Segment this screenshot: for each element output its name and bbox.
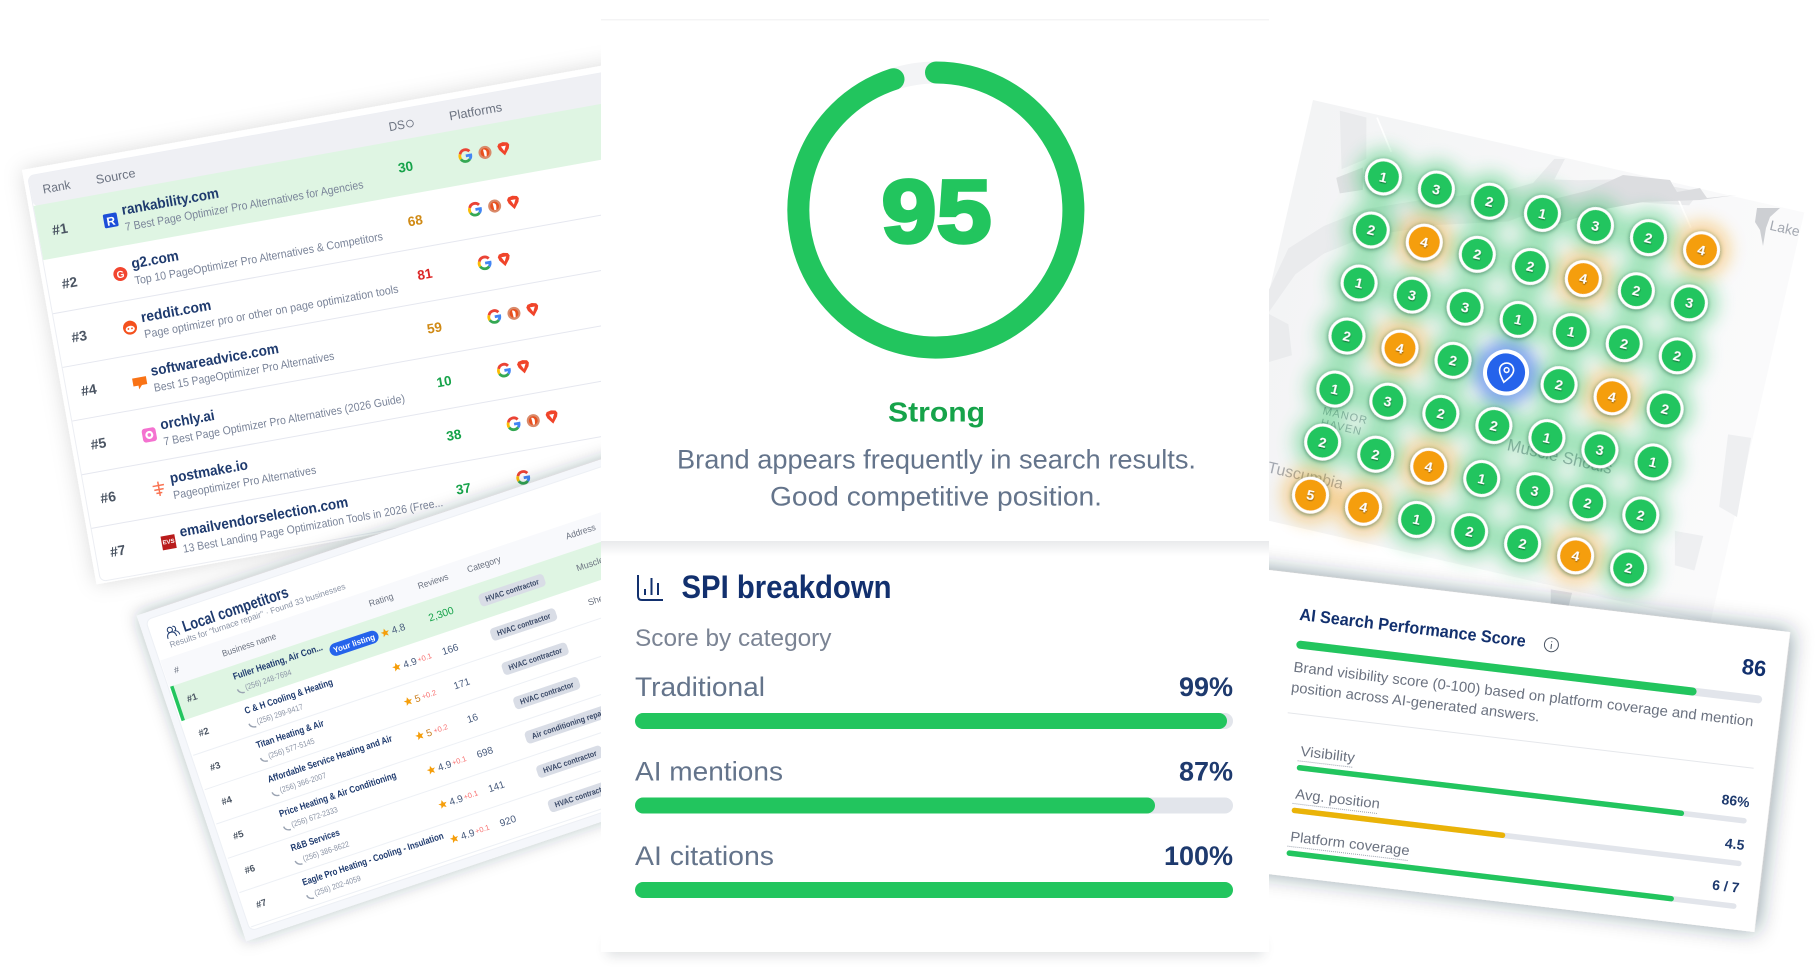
row 4: softwareadvice.com: Best 15 PageOptimizer Pro Alternatives <box>153 351 336 395</box>
card top edge <box>601 19 1269 20</box>
row 2: g2.com: #2 <box>60 273 79 292</box>
row 7: emailvendorselection.com <box>107 462 532 568</box>
marker rank numbers: 2 <box>1553 376 1565 393</box>
competitor row 1: Muscle Shoals <box>575 545 634 573</box>
score ring gauge <box>798 72 1074 348</box>
competitor row 7: 920 <box>498 814 518 830</box>
competitor row 3: +0.2 <box>421 688 437 701</box>
competitor row 7: 4.9 <box>460 828 477 843</box>
competitor row 6: #6 <box>243 863 257 877</box>
map terrain: river and land blocks <box>1269 111 1751 607</box>
marker rank numbers: 1 <box>1566 323 1577 340</box>
row 1: rankability.com: R <box>105 214 117 229</box>
row 4: softwareadvice.com: 59 <box>426 319 443 337</box>
row 2: g2.com: 68 <box>406 212 424 229</box>
table header: Category <box>466 554 503 575</box>
competitor row 7: (256) 202-4059 <box>313 874 362 898</box>
breakdown subheading: Score by category <box>635 625 832 652</box>
score number: 95 <box>882 161 992 261</box>
competitor row 7: Eagle Pro Heating - Cooling - Insulation <box>301 831 445 888</box>
metric: average position <box>1291 783 1746 867</box>
marker rank numbers: 2 <box>1317 433 1328 451</box>
competitor row 6: R&B Services <box>289 827 341 854</box>
table left rule <box>28 63 727 582</box>
marker rank numbers: 1 <box>1647 453 1659 471</box>
marker rank numbers: 1 <box>1513 311 1524 328</box>
row 1: rankability.com: 30 <box>397 158 414 176</box>
metric: traditional <box>635 672 1233 729</box>
panel: source ranking table <box>22 56 727 584</box>
marker rank numbers: 3 <box>1431 180 1442 198</box>
competitor row 6 <box>241 740 606 882</box>
competitor row 7: #7 <box>255 897 268 911</box>
marker rank numbers: 2 <box>1472 246 1483 263</box>
map: lake <box>1755 208 1780 246</box>
row 5: orchly.ai: #5 <box>89 434 108 453</box>
competitor row 4 <box>218 671 583 814</box>
marker rank numbers: 2 <box>1488 417 1500 434</box>
marker rank numbers: 2 <box>1582 494 1594 512</box>
marker rank numbers: 2 <box>1619 335 1630 352</box>
map labels: Lake <box>1768 217 1802 239</box>
panel: AI search performance score <box>1194 565 1790 932</box>
competitor row 6: (256) 386-8622 <box>302 839 351 863</box>
icon: info <box>1544 637 1559 653</box>
competitor row 2: HVAC contractor <box>496 612 552 638</box>
table header: Reviews <box>416 571 450 591</box>
score card background <box>1194 565 1790 932</box>
marker rank numbers: 1 <box>1329 380 1341 398</box>
metric: average position: Avg. position <box>1295 786 1381 812</box>
row separators <box>53 201 717 528</box>
highlighted row accent <box>170 686 185 721</box>
row 4: softwareadvice.com: #4 <box>80 381 98 399</box>
marker rank numbers: 2 <box>1341 327 1353 345</box>
row 3: reddit.com: Page optimizer pro or other on page optimization tools <box>143 284 400 341</box>
marker rank numbers <box>1305 168 1707 577</box>
row 7: emailvendorselection.com: 13 Best Landing Page Optimization Tools in 2026 (Free... <box>182 497 444 556</box>
table header band: Rank <box>42 178 72 197</box>
row 1: rankability.com: rankability.com <box>120 186 220 219</box>
score description: Brand visibility score (0-100) based on platform coverage and mention <box>1293 660 1754 730</box>
marker rank numbers: 5 <box>1305 486 1316 504</box>
marker rank numbers: 2 <box>1525 258 1536 275</box>
row 1: rankability.com <box>50 134 513 247</box>
row 6: postmake.io <box>98 402 561 515</box>
marker rank numbers: 3 <box>1684 294 1695 312</box>
competitor row 5: 4.9 <box>437 759 454 774</box>
metric: platform coverage: Platform coverage <box>1289 828 1411 858</box>
competitor row 2: (256) 299-9417 <box>255 702 305 726</box>
score description <box>677 444 1196 512</box>
row separators <box>193 580 773 927</box>
metric: AI mentions: 87% <box>1179 757 1233 787</box>
competitor row 3: #3 <box>209 760 222 774</box>
map labels: HAVEN <box>1319 417 1363 438</box>
competitor row 5 <box>230 699 615 848</box>
row 7: emailvendorselection.com: emailvendorselection.com <box>178 495 349 541</box>
table header: Address <box>564 522 597 541</box>
score heading: AI Search Performance Score <box>1299 605 1527 651</box>
row 7: emailvendorselection.com: 37 <box>455 480 472 498</box>
highlighted row background <box>34 93 669 260</box>
competitor row 5: +0.1 <box>451 754 468 767</box>
table card background <box>22 57 726 584</box>
marker rank numbers: 3 <box>1529 482 1541 499</box>
competitor row 1: 4.8 <box>390 622 407 637</box>
table header <box>160 484 692 687</box>
competitor row 1: #1 <box>185 691 200 705</box>
competitor row 3: HVAC contractor <box>507 646 563 672</box>
metric: AI mentions <box>635 757 1233 814</box>
competitor row 6: +0.1 <box>462 788 479 802</box>
row 5: orchly.ai: 7 Best Page Optimizer Pro Alternatives (2026 Guide) <box>163 393 406 448</box>
blue heat glow <box>1468 334 1544 411</box>
marker rank numbers: 4 <box>1423 458 1435 475</box>
competitor row 3: (256) 577-5145 <box>267 736 316 760</box>
competitor row 5: 698 <box>475 745 495 761</box>
competitor row 6: 141 <box>487 779 507 795</box>
metric: AI citations <box>635 841 1233 898</box>
competitor row 7: HVAC contractor <box>554 783 609 809</box>
marker rank numbers: 3 <box>1594 441 1606 459</box>
competitor row 1 <box>183 539 636 711</box>
competitors card background <box>137 437 777 941</box>
highlighted row background <box>170 511 704 721</box>
map labels: Muscle Shoals <box>1506 435 1614 478</box>
breakdown heading: SPI breakdown <box>682 569 892 605</box>
competitor row 2: Sheffield <box>587 587 623 607</box>
competitor row 4: (256) 366-2007 <box>279 771 328 795</box>
competitor row 1: Fuller Heating, Air Con... <box>232 642 324 683</box>
row 6: postmake.io: #6 <box>99 488 117 506</box>
competitor row 5: Air conditioning repair <box>530 707 607 741</box>
map base <box>1219 100 1804 622</box>
center location marker <box>1481 347 1531 398</box>
table header: # <box>173 664 181 675</box>
row 3: reddit.com: #3 <box>70 327 88 345</box>
row 6: postmake.io: Pageoptimizer Pro Alternatives <box>172 465 317 502</box>
subheading: results summary: Results for "furnace repair" · Found 33 businesses <box>168 581 347 650</box>
marker rank numbers: 4 <box>1394 340 1406 357</box>
competitor row 4: #4 <box>220 794 234 808</box>
competitor row 2: 4.9 <box>402 656 419 671</box>
table header band <box>28 63 660 207</box>
row 4: softwareadvice.com <box>79 294 542 408</box>
marker rank numbers: 2 <box>1366 221 1377 239</box>
competitor row 1: (256) 248-7694 <box>244 668 293 692</box>
marker rank numbers: 2 <box>1643 229 1654 246</box>
marker rank numbers: 1 <box>1378 168 1389 186</box>
marker rank numbers: 2 <box>1484 193 1495 210</box>
marker rank numbers: 2 <box>1635 506 1647 524</box>
row 2: g2.com: Top 10 PageOptimizer Pro Alternatives & Competitors <box>134 231 384 287</box>
row 1: rankability.com: #1 <box>51 220 69 238</box>
metric: AI citations: 100% <box>1164 841 1233 871</box>
marker rank numbers: 4 <box>1419 233 1430 251</box>
row 5: orchly.ai: 10 <box>435 373 453 390</box>
marker rank numbers: 2 <box>1672 347 1683 365</box>
map labels: MANOR <box>1321 405 1369 427</box>
metric: platform coverage <box>1286 826 1741 909</box>
score description: position across AI-generated answers. <box>1290 680 1540 726</box>
row 5: orchly.ai <box>88 351 532 461</box>
marker rank numbers: 2 <box>1435 405 1447 422</box>
competitor row 1: 2,300 <box>427 605 456 624</box>
competitor row 1: Your listing <box>332 632 376 655</box>
score value: 86 <box>1740 654 1768 681</box>
row 3: reddit.com <box>69 244 513 354</box>
map labels: Tuscumbia <box>1266 459 1345 493</box>
competitor row 7: +0.1 <box>474 823 491 836</box>
rank markers grid <box>1290 157 1722 588</box>
orange heat glow <box>1278 145 1734 600</box>
competitor row 2: +0.1 <box>416 651 433 664</box>
competitor row 2 <box>195 581 625 745</box>
table header band: DS <box>388 118 406 134</box>
row 4: softwareadvice.com: softwareadvice.com <box>149 341 280 380</box>
marker rank numbers: 4 <box>1570 547 1581 565</box>
marker rank numbers: 3 <box>1590 217 1601 234</box>
panel: geo grid heat map <box>1219 100 1804 622</box>
competitor row 6: HVAC contractor <box>542 749 598 775</box>
competitor row 1: HVAC contractor <box>484 577 540 604</box>
competitors inner panel <box>146 444 774 931</box>
row 1: rankability.com: 7 Best Page Optimizer Pro Alternatives for Agencies <box>124 179 365 234</box>
competitor row 4: 16 <box>466 712 480 726</box>
competitor row 7 <box>253 774 618 917</box>
competitor row 3: Titan Heating & Air <box>255 718 326 751</box>
competitor row 4: HVAC contractor <box>519 680 575 707</box>
marker rank numbers: 3 <box>1382 393 1394 410</box>
marker rank numbers: 4 <box>1578 270 1589 287</box>
marker rank numbers: 1 <box>1411 511 1422 528</box>
row 3: reddit.com: reddit.com <box>140 298 212 326</box>
row 3: reddit.com: 81 <box>416 266 434 283</box>
marker rank numbers: 1 <box>1537 205 1548 222</box>
marker rank numbers: 4 <box>1696 241 1707 259</box>
competitor row 3: 171 <box>452 676 472 692</box>
metric: visibility: Visibility <box>1300 743 1356 765</box>
marker rank numbers: 1 <box>1541 429 1553 446</box>
table header: Rating <box>367 591 395 609</box>
marker rank numbers: 1 <box>1354 274 1365 292</box>
marker rank numbers: 1 <box>1476 470 1488 487</box>
row 2: g2.com: g2.com <box>130 248 180 272</box>
score description: Good competitive position. <box>770 482 1102 512</box>
competitor row 2: C & H Cooling & Heating <box>243 677 335 717</box>
row 7: emailvendorselection.com: EVS <box>162 539 175 547</box>
metric: AI citations: AI citations <box>635 841 774 871</box>
row 5: orchly.ai: orchly.ai <box>159 408 216 433</box>
icon: bar chart <box>638 575 663 600</box>
row 6: postmake.io: 38 <box>445 426 463 444</box>
marker rank numbers: 2 <box>1464 523 1475 540</box>
marker rank numbers: 2 <box>1370 446 1381 463</box>
table header: Business name <box>221 631 277 659</box>
competitor row 5: (256) 672-2333 <box>290 805 339 829</box>
score description: Brand appears frequently in search results. <box>677 444 1196 474</box>
map overlays in rotated frame <box>1258 120 1802 616</box>
competitor row 5: Price Heating & Air Conditioning <box>278 770 398 820</box>
marker rank numbers: 2 <box>1517 535 1528 552</box>
card bottom shadow <box>607 940 1263 956</box>
marker rank numbers: 4 <box>1358 499 1369 516</box>
competitor row 4: +0.2 <box>432 722 449 735</box>
central card background <box>601 20 1269 952</box>
score overall bar <box>1296 640 1763 704</box>
panel: central SPI card <box>601 19 1269 956</box>
icon: people <box>165 625 180 639</box>
marker rank numbers: 4 <box>1607 388 1618 405</box>
competitor row 3 <box>206 637 571 779</box>
map: dark river section <box>1550 175 1737 227</box>
panel: local competitors table <box>137 437 777 941</box>
metric: platform coverage: 6 / 7 <box>1711 877 1741 896</box>
metric: average position: 4.5 <box>1724 835 1746 853</box>
competitor row 2: #2 <box>197 726 211 740</box>
table header band: Platforms <box>448 100 503 123</box>
row 2: g2.com <box>59 187 522 300</box>
metric: AI mentions: AI mentions <box>635 757 783 787</box>
marker rank numbers: 2 <box>1660 400 1671 418</box>
row 6: postmake.io: postmake.io <box>169 457 249 487</box>
metric: traditional: 99% <box>1179 672 1233 702</box>
card section shadow <box>601 541 1269 556</box>
map labels <box>1266 120 1802 580</box>
competitor row 3: 5 <box>413 693 423 705</box>
metric: visibility: 86% <box>1721 791 1751 810</box>
competitor row 4: Affordable Service Heating and Air <box>266 733 394 786</box>
competitor row 5: #5 <box>232 828 246 842</box>
metric: visibility <box>1296 741 1751 824</box>
marker rank numbers: 2 <box>1447 352 1459 369</box>
marker rank numbers: 2 <box>1623 559 1634 577</box>
green heat glow <box>1277 143 1735 602</box>
competitor row 6: 4.9 <box>448 793 465 808</box>
metric: traditional: Traditional <box>635 672 765 702</box>
score label: Strong <box>888 396 985 428</box>
row 2: g2.com: G <box>116 269 126 281</box>
table header band: Source <box>95 166 137 187</box>
row 7: emailvendorselection.com: #7 <box>109 541 127 560</box>
competitor row 2: 166 <box>441 642 460 658</box>
heading: local competitors: Local competitors <box>180 584 291 636</box>
marker rank numbers: 2 <box>1631 282 1642 299</box>
marker rank numbers: 3 <box>1407 286 1418 304</box>
marker rank numbers: 3 <box>1460 299 1471 316</box>
competitor row 4: 5 <box>425 727 434 740</box>
